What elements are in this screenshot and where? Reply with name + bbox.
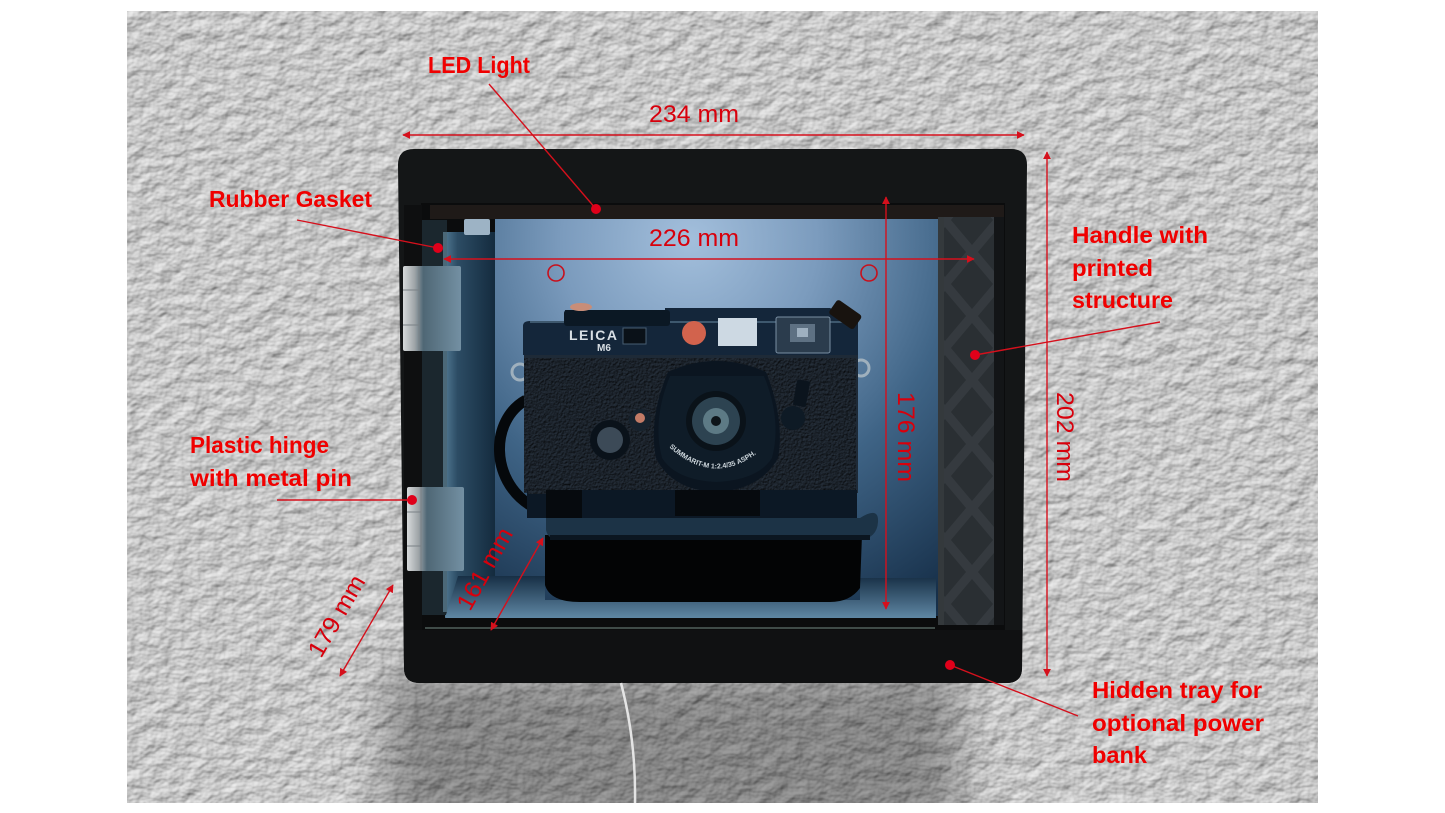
lens mount base xyxy=(675,490,760,516)
shutter button xyxy=(570,303,592,311)
handle with printed structure xyxy=(938,217,1004,625)
stand shadow block xyxy=(545,535,862,602)
annotation: Handle with printed structure: structure xyxy=(1072,287,1173,313)
box outer frame xyxy=(398,149,1027,683)
dimension: 226 mm: 226 mm xyxy=(649,225,739,252)
viewfinder xyxy=(776,317,830,353)
stand xyxy=(545,513,878,602)
small clip xyxy=(464,219,490,235)
top plate xyxy=(523,308,858,355)
lens engraving: SUMMARIT-M 1:2.4/35 ASPH. xyxy=(670,444,756,468)
lens hood xyxy=(654,361,780,492)
annotation: LED Light xyxy=(428,52,601,214)
hand grip xyxy=(528,362,582,518)
door edge xyxy=(404,205,422,630)
dimension: 179 mm xyxy=(303,571,393,676)
power cable xyxy=(621,683,635,803)
dimension: 202 mm: 202 mm xyxy=(1051,392,1078,482)
leather body xyxy=(524,355,858,493)
shutter dial xyxy=(564,310,670,326)
rewind knob xyxy=(828,299,862,330)
red dot logo xyxy=(682,321,706,345)
frame window xyxy=(718,318,757,346)
dimension: 176 mm: 176 mm xyxy=(892,392,919,482)
dimension: 234 mm: 234 mm xyxy=(649,101,739,128)
LED strip shade xyxy=(430,205,1004,219)
annotation: LED Light: LED Light xyxy=(428,52,530,78)
hinge bottom xyxy=(407,487,464,571)
annotation: Hidden tray: bank xyxy=(1092,742,1147,768)
stand plate xyxy=(546,513,878,540)
model text: M6 xyxy=(597,343,611,354)
frame counter xyxy=(623,328,646,344)
Leica brand text: LEICA xyxy=(569,327,617,343)
bottom lip xyxy=(425,627,935,629)
annotation: Plastic hinge with metal pin: with metal pin xyxy=(189,465,352,491)
annotation: Hidden tray xyxy=(945,660,1264,768)
right knob xyxy=(781,379,810,430)
back wall xyxy=(495,219,939,616)
camera strap loop xyxy=(499,400,530,505)
dimension: 179 mm: 179 mm xyxy=(303,571,371,662)
annotation: Handle with printed structure: Handle with xyxy=(1072,222,1208,248)
dimension: 161 mm: 161 mm xyxy=(452,523,519,615)
dimension: 161 mm xyxy=(452,523,543,630)
annotation: Handle with printed structure xyxy=(970,222,1208,360)
mounting hole marker left xyxy=(548,265,564,281)
annotation: Hidden tray: optional power xyxy=(1092,710,1264,736)
annotation: Rubber Gasket xyxy=(209,186,443,253)
annotation: Rubber Gasket: Rubber Gasket xyxy=(209,186,372,212)
left side panel xyxy=(445,232,495,617)
hinge top xyxy=(403,266,461,351)
annotation: Plastic hinge with metal pin: Plastic hinge xyxy=(190,432,329,458)
floor xyxy=(445,576,936,618)
mounting hole marker right xyxy=(861,265,877,281)
box inner recess xyxy=(421,203,1005,630)
left control xyxy=(590,409,651,460)
annotation: Handle with printed structure: printed xyxy=(1072,255,1153,281)
camera xyxy=(494,300,870,518)
bottom plate xyxy=(527,490,857,518)
camera lugs xyxy=(512,360,869,380)
annotation: Plastic hinge with metal pin xyxy=(189,432,417,505)
annotation: Hidden tray: Hidden tray for xyxy=(1092,677,1262,703)
display box xyxy=(398,149,1027,683)
lens xyxy=(686,391,746,451)
